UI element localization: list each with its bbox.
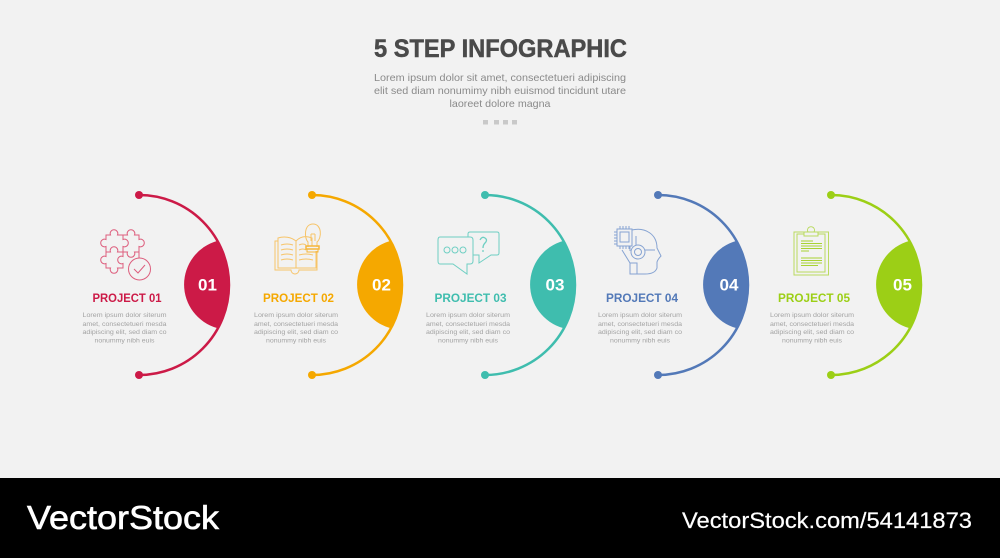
description 04: [598, 312, 682, 344]
end dot 01: [135, 371, 143, 379]
end dot 05: [827, 371, 835, 379]
description 01: Lorem ipsum dolor siterum: [82, 312, 167, 319]
start dot 02: [308, 191, 316, 199]
project title 01: PROJECT 01: [92, 293, 162, 305]
icon: book and light bulb: [275, 224, 320, 274]
description 02: [254, 312, 338, 344]
half circle 05: [876, 241, 920, 328]
footer image id: VectorStock.com/54141873: [682, 508, 972, 533]
description 05: amet, consectetueri mesda: [770, 321, 854, 328]
half circle 02: [357, 241, 401, 328]
arc 03: [485, 195, 575, 375]
end dot 04: [654, 371, 662, 379]
step 4: project 04: [598, 191, 748, 379]
intro text: Lorem ipsum dolor sit amet, consectetueri adipiscing: [374, 72, 626, 84]
number 01: 01: [198, 276, 217, 294]
arc 02: [312, 195, 402, 375]
description 01: nonummy nibh euis: [94, 338, 155, 344]
description 05: Lorem ipsum dolor siterum: [770, 312, 854, 319]
description 03: [426, 312, 510, 344]
icon: AI head with chip: [614, 226, 661, 274]
footer logo: VectorStock: [27, 499, 220, 536]
number 03: 03: [546, 276, 564, 294]
description 02: amet, consectetueri mesda: [254, 321, 338, 328]
description 04: adipiscing elit, sed diam co: [598, 329, 682, 336]
arc 04: [658, 195, 748, 375]
icon: speech bubbles: [438, 232, 499, 274]
project title 04: PROJECT 04: [606, 293, 679, 305]
project title 05: PROJECT 05: [778, 293, 851, 305]
number 05: 05: [893, 276, 912, 294]
description 05: adipiscing elit, sed diam co: [770, 329, 854, 336]
description 03: nonummy nibh euis: [438, 338, 499, 344]
description 03: Lorem ipsum dolor siterum: [426, 312, 510, 319]
description 02: Lorem ipsum dolor siterum: [254, 312, 338, 319]
step 2: project 02: [254, 191, 402, 379]
project title 03: PROJECT 03: [434, 293, 506, 305]
description 04: amet, consectetueri mesda: [598, 321, 682, 328]
description 02: nonummy nibh euis: [266, 338, 327, 344]
number 02: 02: [372, 276, 391, 294]
description 05: [770, 312, 854, 344]
footer bar: [0, 478, 1000, 558]
step 3: project 03: [426, 191, 575, 379]
intro text: laoreet dolore magna: [450, 98, 551, 110]
description 01: amet, consectetueri mesda: [82, 321, 167, 328]
number 04: 04: [720, 276, 739, 294]
step 1: project 01: [82, 191, 229, 379]
icon: puzzle with check: [101, 230, 150, 280]
start dot 05: [827, 191, 835, 199]
half circle 01: [184, 241, 228, 328]
arc 01: [139, 195, 229, 375]
end dot 02: [308, 371, 316, 379]
start dot 01: [135, 191, 143, 199]
description 04: nonummy nibh euis: [610, 338, 671, 344]
description 01: adipiscing elit, sed diam co: [82, 329, 167, 336]
start dot 04: [654, 191, 662, 199]
start dot 03: [481, 191, 489, 199]
title: 5 STEP INFOGRAPHIC: [374, 35, 627, 63]
description 03: amet, consectetueri mesda: [426, 321, 510, 328]
step 5: project 05: [770, 191, 921, 379]
half circle 04: [703, 241, 747, 328]
half circle 03: [530, 241, 574, 328]
project title 02: PROJECT 02: [263, 293, 334, 305]
pagination dots: [483, 120, 517, 124]
description 01: [82, 312, 167, 344]
description 05: nonummy nibh euis: [782, 338, 843, 344]
end dot 03: [481, 371, 489, 379]
intro text: [374, 72, 626, 110]
description 04: Lorem ipsum dolor siterum: [598, 312, 682, 319]
arc 05: [831, 195, 921, 375]
description 03: adipiscing elit, sed diam co: [426, 329, 510, 336]
icon: clipboard: [794, 227, 828, 275]
description 02: adipiscing elit, sed diam co: [254, 329, 338, 336]
intro text: elit sed diam nonumimy nibh euismod tincidunt utare: [374, 85, 626, 97]
